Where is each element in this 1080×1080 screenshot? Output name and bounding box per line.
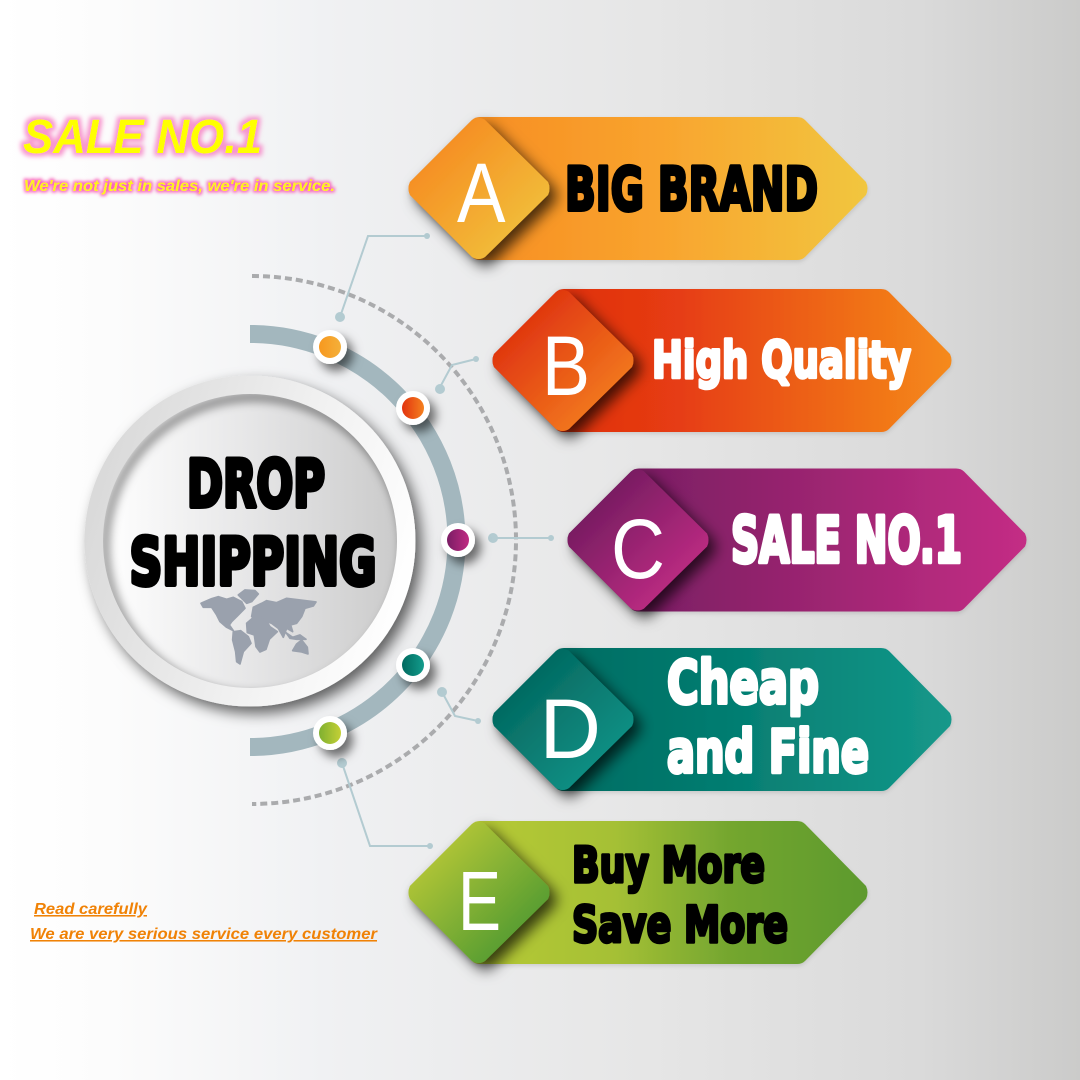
banner D: Cheap and Fine: Cheap [667, 648, 819, 718]
timeline node: red [396, 391, 430, 425]
timeline node: green [313, 716, 347, 750]
timeline node: teal [396, 648, 430, 682]
banner B: High Quality: High Quality [652, 332, 911, 390]
headline: SALE NO.1: SALE NO.1 [23, 111, 262, 164]
tagline: We're not just in sales, we're in service. [24, 178, 335, 195]
note: service statement: We are very serious service every customer [30, 926, 378, 943]
banner E: Buy More Save More: Buy More [572, 837, 765, 894]
banner E: Buy More Save More: Save More [572, 896, 788, 954]
banner A: Big Brand: A [457, 146, 506, 240]
banner C: Sale No.1 [568, 468, 1026, 612]
timeline node: purple [441, 523, 475, 557]
banner C: Sale No.1: C [611, 502, 665, 596]
banner A: Big Brand: BIG BRAND [565, 155, 818, 225]
curved timeline band [250, 334, 456, 747]
title: SHIPPING: SHIPPING [130, 526, 376, 600]
note: read carefully: Read carefully [34, 901, 148, 918]
banner A: Big Brand [408, 117, 868, 260]
leader lines [335, 233, 554, 849]
inner disc [103, 394, 397, 688]
banner E: Buy More Save More [408, 821, 868, 964]
banner E: Buy More Save More: E [458, 854, 501, 948]
timeline node: orange [313, 330, 347, 364]
outer ring [84, 376, 416, 706]
inner shadow [105, 397, 405, 697]
banner B: High Quality [492, 289, 952, 432]
central circle badge [84, 376, 416, 706]
banner D: Cheap and Fine: D [540, 682, 601, 776]
banner D: Cheap and Fine [492, 648, 952, 791]
world map [201, 590, 316, 664]
title: DROP: DROP [187, 448, 325, 522]
banner D: Cheap and Fine: and Fine [667, 717, 869, 786]
banner B: High Quality: B [542, 319, 590, 413]
dashed outer arc [252, 276, 516, 804]
